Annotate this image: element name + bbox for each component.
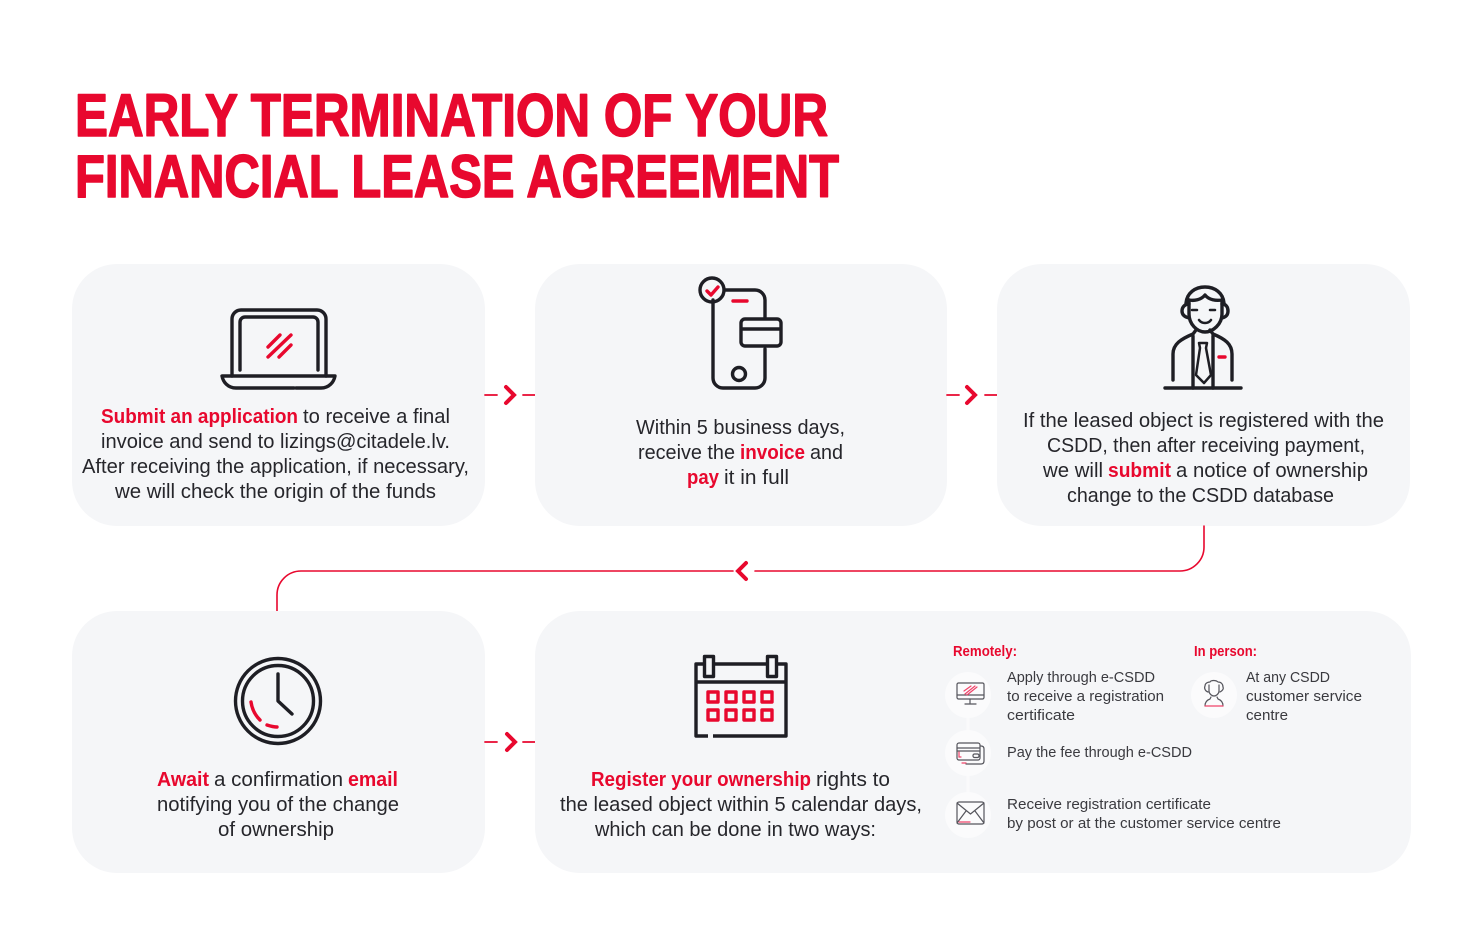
text: step 1: invoice and send to lizings@citadele.lv. <box>101 431 450 453</box>
text: step 5: the leased object within 5 calendar days, <box>560 794 922 816</box>
arrow: step 2 to 3 <box>947 387 997 403</box>
arrow: return connector <box>277 526 1204 611</box>
icon: phone with card <box>700 278 781 388</box>
heading: in person: In person: <box>1194 644 1257 660</box>
text: pay: Pay the fee through e-CSDD <box>1007 745 1192 761</box>
text: at any centre: At any CSDD <box>1246 670 1330 686</box>
title <box>75 82 839 210</box>
arrow: step 1 to 2 <box>485 387 535 403</box>
panel: invoice <box>535 264 947 526</box>
text: step 1: we will check the origin of the funds <box>114 481 436 503</box>
text: step 3: If the leased object is registered with the <box>1023 410 1384 432</box>
icon: monitor <box>945 672 991 815</box>
text: step 4: of ownership <box>218 819 334 841</box>
text: step 4 <box>157 769 399 841</box>
text: apply: Apply through e-CSDD <box>1007 670 1155 686</box>
icon: laptop <box>222 310 335 388</box>
panel: await confirmation <box>72 611 485 873</box>
text: step 2: and <box>810 442 843 464</box>
icon: consultant <box>1165 287 1241 388</box>
text: step 2: receive the <box>638 442 735 464</box>
text: step 5: rights to <box>816 769 890 791</box>
text: receive: by post or at the customer service centre <box>1007 816 1281 832</box>
text: step 1: Submit an application <box>101 406 298 428</box>
text: step 2 <box>636 417 845 489</box>
text: apply: certificate <box>1007 708 1075 724</box>
text: step 5 <box>560 769 922 841</box>
text: step 4: notifying you of the change <box>157 794 399 816</box>
text: step 4: Await <box>157 769 209 791</box>
text: step 1: After receiving the application, if necessary, <box>82 456 469 478</box>
text: step 4: a confirmation <box>214 769 343 791</box>
icon: payment cards <box>945 730 991 776</box>
icon: calendar <box>696 656 786 736</box>
panel: ownership notice <box>997 264 1410 526</box>
text: step 3: we will <box>1042 460 1103 482</box>
text: step 3: a notice of ownership <box>1176 460 1368 482</box>
icon: service agent <box>1191 672 1237 718</box>
text: step 2: it in full <box>724 467 789 489</box>
text: step 3 <box>1023 410 1384 507</box>
text: receive <box>1007 797 1281 832</box>
text: at any centre <box>1246 670 1362 724</box>
title: FINANCIAL LEASE AGREEMENT <box>75 143 839 210</box>
text: step 3: CSDD, then after receiving payment, <box>1047 435 1365 457</box>
text: step 5: which can be done in two ways: <box>594 819 876 841</box>
icon: envelope <box>945 792 991 838</box>
text: apply <box>1007 670 1164 724</box>
column: remotely <box>945 644 1281 838</box>
panel: register ownership <box>535 611 1411 873</box>
heading: remotely: Remotely: <box>953 644 1017 660</box>
title: EARLY TERMINATION OF YOUR <box>75 82 828 149</box>
text: step 3: submit <box>1108 460 1171 482</box>
text: step 4: email <box>348 769 398 791</box>
text: step 2: pay <box>687 467 720 489</box>
text: step 1 <box>82 406 469 503</box>
text: apply: to receive a registration <box>1007 689 1164 705</box>
text: at any centre: customer service <box>1246 689 1362 705</box>
panel: submit application <box>72 264 485 526</box>
text: step 2: Within 5 business days, <box>636 417 845 439</box>
text: receive: Receive registration certificate <box>1007 797 1211 813</box>
text: step 2: invoice <box>740 442 805 464</box>
column: in person <box>1191 644 1362 724</box>
text: step 1: to receive a final <box>303 406 450 428</box>
icon: clock <box>236 658 320 744</box>
text: step 5: Register your ownership <box>591 769 811 791</box>
arrow: step 4 to 5 <box>485 734 535 750</box>
text: step 3: change to the CSDD database <box>1067 485 1334 507</box>
text: at any centre: centre <box>1246 708 1288 724</box>
